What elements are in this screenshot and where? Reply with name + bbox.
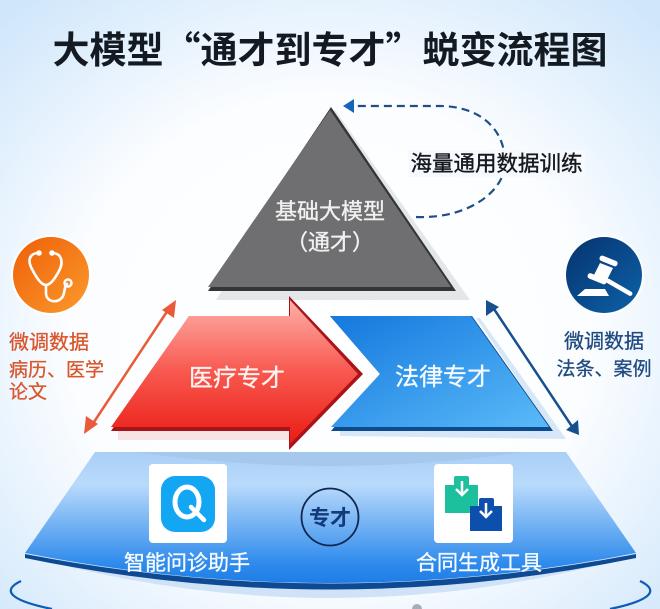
text: medical fine-tuning data: 论文 <box>9 381 47 403</box>
icon: consultation assistant <box>149 464 227 543</box>
panel: medical specialist arrow: 医疗专才 <box>189 365 285 392</box>
icon: gavel <box>564 235 644 315</box>
text: legal fine-tuning data <box>556 330 652 380</box>
label: contract tool: 合同生成工具 <box>416 552 542 575</box>
double arrow: medical <box>84 300 176 434</box>
double arrow: legal <box>486 300 579 435</box>
title: 大模型“通才到专才”蜕变流程图 <box>52 20 608 74</box>
text: legal fine-tuning data: 法条、案例 <box>556 358 652 380</box>
text: medical fine-tuning data: 病历、医学 <box>9 359 104 381</box>
panel: medical specialist arrow <box>111 296 363 450</box>
label: general data training: 海量通用数据训练 <box>410 152 583 176</box>
dashed arrow: general data training <box>343 99 505 217</box>
icon: stethoscope <box>11 235 91 315</box>
triangle: base large model <box>208 107 470 300</box>
triangle: base large model: （通才） <box>286 230 374 255</box>
label: consultation assistant: 智能问诊助手 <box>124 552 250 575</box>
panel: legal specialist <box>330 316 566 439</box>
badge: specialist <box>302 488 358 546</box>
text: medical fine-tuning data: 微调数据 <box>9 331 89 354</box>
icon: contract documents <box>434 464 513 543</box>
triangle: base large model: 基础大模型 <box>275 199 385 224</box>
text: medical fine-tuning data <box>9 331 104 403</box>
panel: legal specialist: 法律专才 <box>395 364 491 391</box>
ring: lower arcs <box>11 581 650 609</box>
text: legal fine-tuning data: 微调数据 <box>564 330 644 353</box>
panel: application platform <box>25 452 636 598</box>
badge: specialist: 专才 <box>309 507 351 530</box>
watermark dot <box>412 604 422 609</box>
